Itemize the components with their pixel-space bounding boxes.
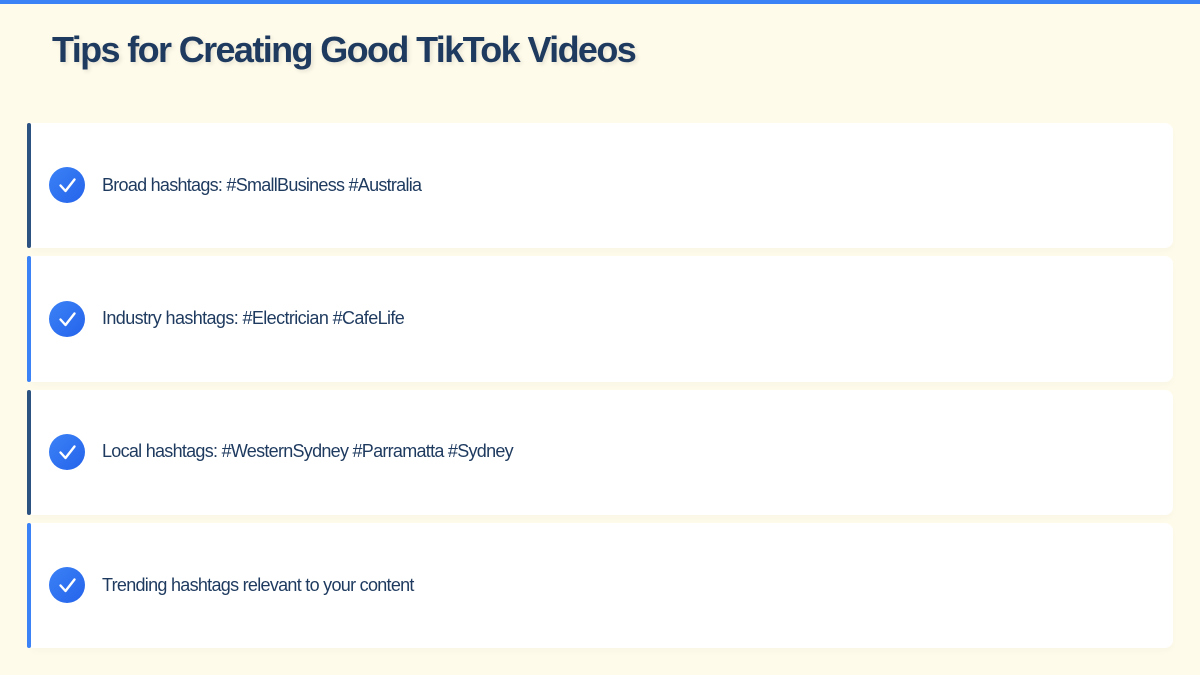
- panel: industry hashtags tip: [27, 256, 1173, 382]
- card accent edge: [27, 523, 31, 648]
- card background: [31, 390, 1173, 515]
- card background: [31, 256, 1173, 382]
- panel: broad hashtags tip: [27, 123, 1173, 248]
- card background: [31, 123, 1173, 248]
- panel: trending hashtags tip: [27, 523, 1173, 648]
- tip text: Broad hashtags: #SmallBusiness #Australia: [102, 175, 421, 195]
- card accent edge: [27, 390, 31, 515]
- tip text: Industry hashtags: #Electrician #CafeLife: [102, 308, 404, 328]
- panel: local hashtags tip: [27, 390, 1173, 515]
- tip text: Local hashtags: #WesternSydney #Parramatta #Sydney: [102, 441, 513, 461]
- card accent edge: [27, 256, 31, 382]
- icon: check circle: [49, 567, 85, 603]
- icon: check circle: [49, 434, 85, 470]
- top accent bar: [0, 0, 1200, 4]
- icon: check circle: [49, 301, 85, 337]
- title: Tips for Creating Good TikTok Videos: [52, 29, 635, 70]
- icon: check circle: [49, 167, 85, 203]
- card accent edge: [27, 123, 31, 248]
- tip text: Trending hashtags relevant to your content: [102, 575, 414, 595]
- card background: [31, 523, 1173, 648]
